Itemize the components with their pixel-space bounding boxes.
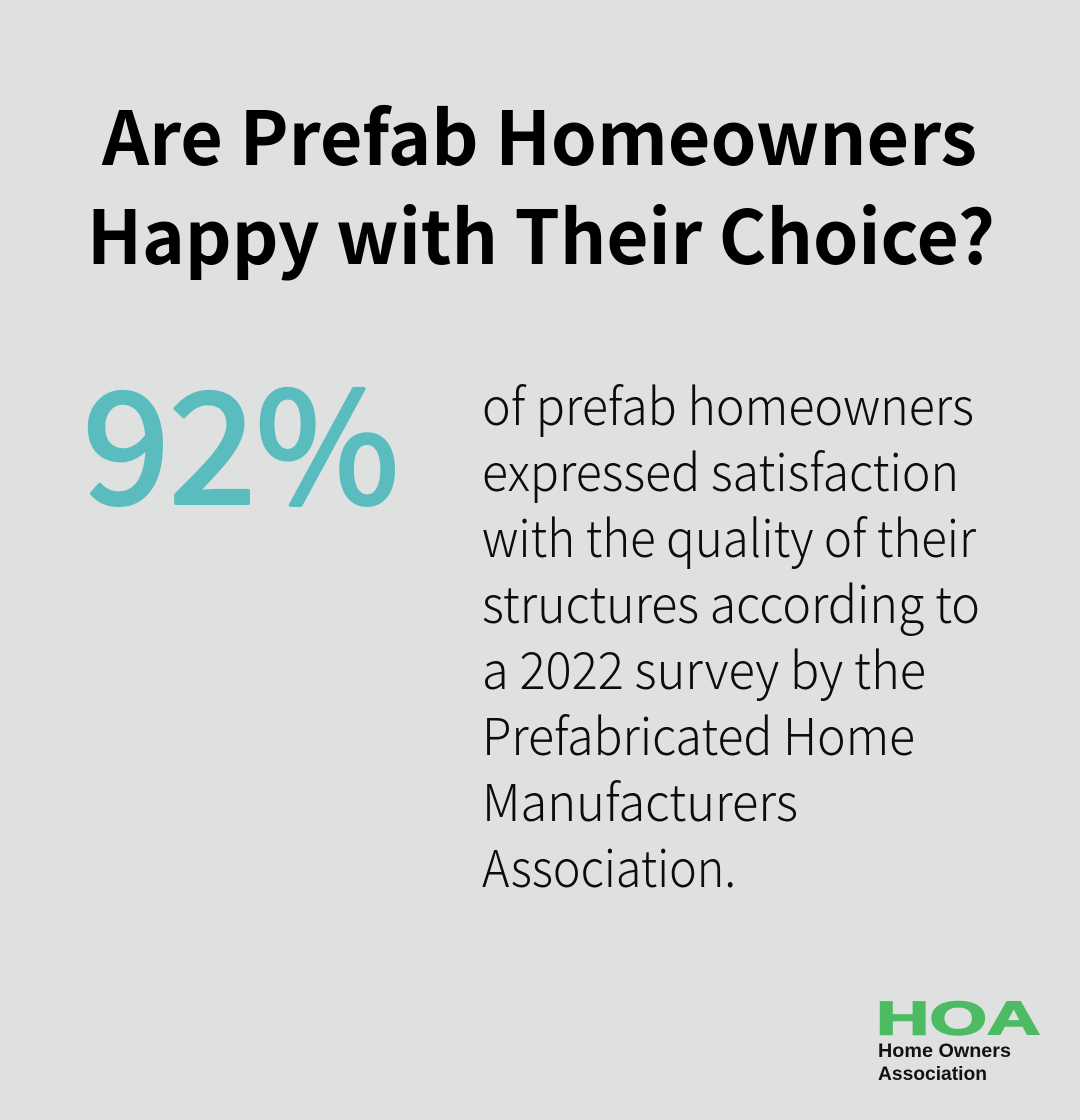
body text: with the quality of their: [482, 498, 977, 572]
body text: a 2022 survey by the: [482, 630, 926, 704]
logo caption: [878, 1040, 1011, 1085]
title: Happy with Their Choice?: [87, 179, 995, 286]
body text: of prefab homeowners: [482, 366, 974, 440]
logo: Home Owners Association: [876, 992, 1040, 1085]
body text: [482, 366, 980, 902]
body text: Association.: [482, 828, 736, 902]
body text: Prefabricated Home: [482, 696, 915, 770]
title: [87, 80, 995, 286]
body text: Manufacturers: [482, 762, 798, 836]
logo wordmark: HOA: [876, 992, 1040, 1044]
statistic: 92%: 92%: [83, 327, 399, 548]
logo caption: Home Owners: [878, 1040, 1011, 1062]
body text: expressed satisfaction: [482, 432, 959, 506]
body text: structures according to: [482, 564, 980, 638]
title: Are Prefab Homeowners: [101, 80, 977, 187]
logo caption: Association: [878, 1063, 987, 1085]
